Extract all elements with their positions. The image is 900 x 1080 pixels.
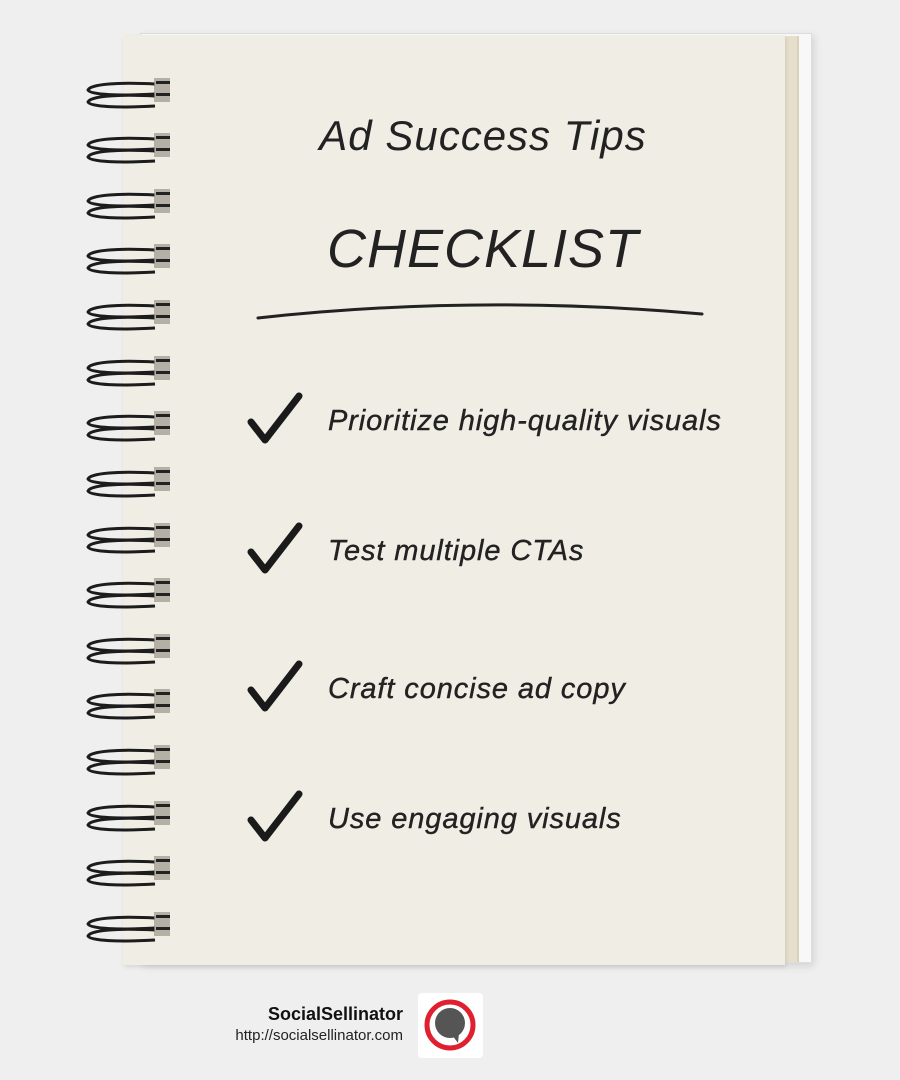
- item 4: Use engaging visuals: [328, 803, 622, 835]
- back cover: [140, 33, 812, 963]
- logo: [418, 993, 483, 1058]
- page stack: [130, 36, 799, 962]
- item 1: Prioritize high-quality visuals: [328, 405, 722, 437]
- underline: [256, 303, 704, 320]
- item 1: [248, 392, 722, 444]
- spiral rings: [86, 78, 170, 942]
- footer brand: [235, 1004, 403, 1044]
- item 2: Test multiple CTAs: [328, 535, 584, 567]
- item 3: Craft concise ad copy: [328, 673, 626, 705]
- item 2: [248, 522, 584, 574]
- title: Ad Success Tips: [319, 112, 647, 159]
- heading: checklist: CHECKLIST: [327, 219, 639, 279]
- item 3: [248, 660, 627, 712]
- item 4: [248, 790, 622, 842]
- front page: [123, 35, 785, 965]
- footer brand: SocialSellinator: [268, 1004, 403, 1024]
- checklist items: [248, 392, 722, 842]
- footer brand: http://socialsellinator.com: [235, 1027, 403, 1044]
